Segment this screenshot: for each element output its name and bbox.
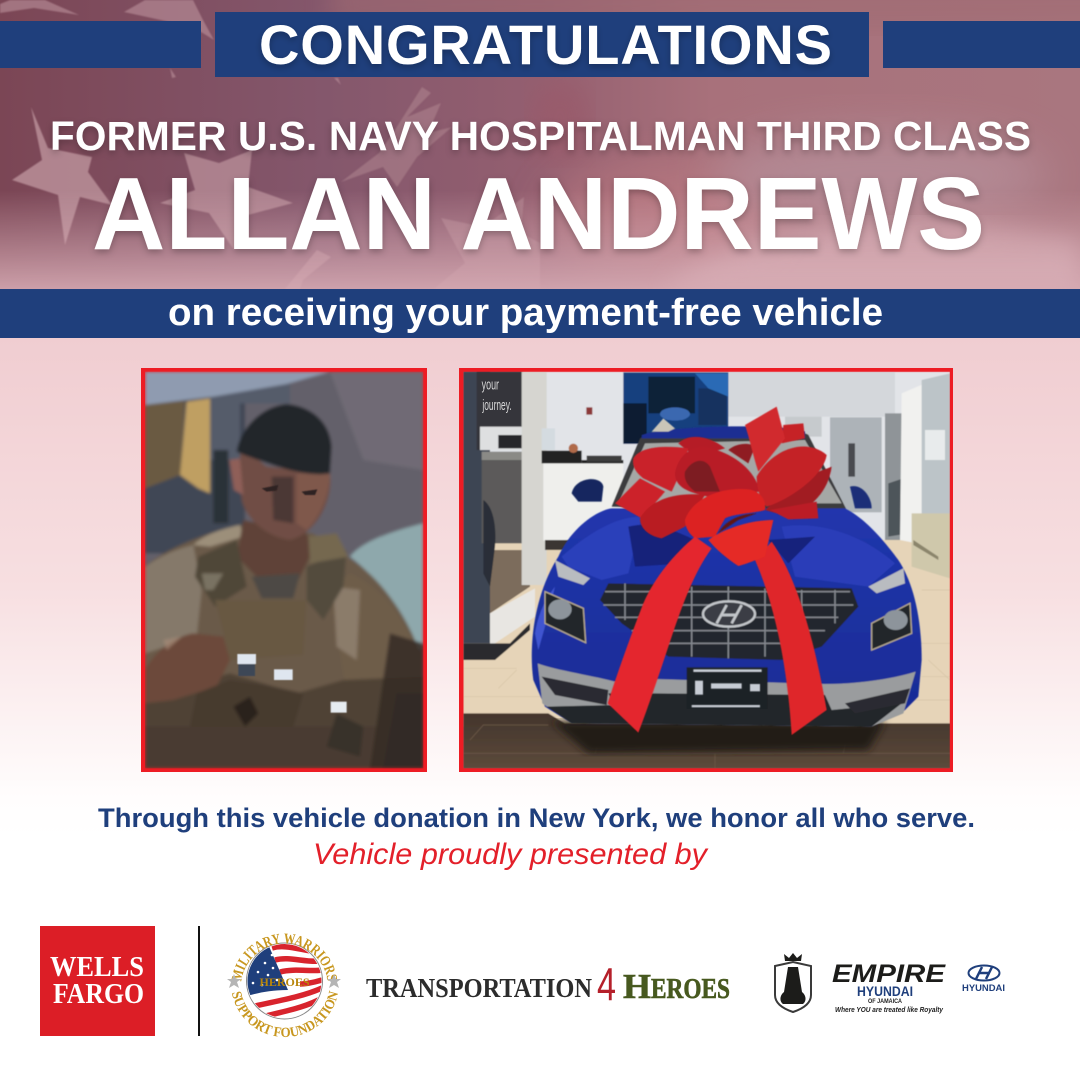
photo: car with red bow bbox=[459, 368, 953, 772]
logo: Wells Fargo: FARGO bbox=[53, 979, 144, 1010]
banner: congratulations: CONGRATULATIONS bbox=[259, 13, 832, 76]
bow bbox=[608, 407, 832, 735]
honor statement: Through this vehicle donation in New York, we honor all who serve. bbox=[98, 803, 975, 833]
banner: payment-free vehicle: on receiving your payment-free vehicle bbox=[168, 292, 883, 334]
page background bbox=[0, 338, 1080, 838]
rank heading: FORMER U.S. NAVY HOSPITALMAN THIRD CLASS bbox=[50, 113, 1031, 159]
logo: Military Warriors Support Foundation: MILITARY WARRIORS bbox=[232, 934, 337, 982]
logo: Empire Hyundai of Jamaica: HYUNDAI bbox=[857, 984, 913, 999]
banner: congratulations bbox=[0, 12, 1080, 77]
logo: Military Warriors Support Foundation bbox=[227, 934, 341, 1038]
logo: Transportation 4 Heroes: 4 bbox=[597, 958, 616, 1010]
lower bumper bbox=[538, 663, 916, 727]
logo: Transportation 4 Heroes: H bbox=[623, 967, 651, 1006]
name heading: ALLAN ANDREWS bbox=[92, 156, 985, 271]
logo: Empire Hyundai of Jamaica: OF JAMAICA bbox=[868, 999, 903, 1005]
divider bbox=[198, 926, 200, 1036]
logo: Wells Fargo: WELLS bbox=[50, 952, 144, 983]
logo: Transportation 4 Heroes bbox=[366, 958, 730, 1010]
logo: Transportation 4 Heroes: EROES bbox=[651, 974, 730, 1005]
photo: soldier bbox=[141, 368, 427, 772]
logo: Military Warriors Support Foundation: HEROES bbox=[260, 975, 310, 989]
header flag background bbox=[0, 0, 1080, 290]
logo: Hyundai bbox=[962, 966, 1005, 994]
photo: car with red bow: journey. bbox=[482, 398, 512, 414]
windshield and roof bbox=[611, 433, 846, 510]
car body bbox=[532, 508, 922, 727]
grille bbox=[600, 583, 858, 660]
presented by line: Vehicle proudly presented by bbox=[313, 838, 709, 871]
logo: Hyundai: HYUNDAI bbox=[962, 983, 1005, 994]
logo: Empire Hyundai of Jamaica: Where YOU are treated like Royalty bbox=[835, 1007, 944, 1014]
sign text: your journey: your bbox=[482, 377, 499, 393]
banner: payment-free vehicle bbox=[0, 289, 1080, 338]
logo: Empire Hyundai of Jamaica bbox=[775, 953, 947, 1014]
logo: Empire Hyundai of Jamaica: EMPIRE bbox=[832, 960, 947, 988]
logo: Military Warriors Support Foundation: SUPPORT FOUNDATION bbox=[232, 990, 338, 1038]
logo: Transportation 4 Heroes: TRANSPORTATION bbox=[366, 973, 592, 1003]
headlights bbox=[555, 560, 590, 585]
logo: Wells Fargo bbox=[40, 926, 155, 1036]
